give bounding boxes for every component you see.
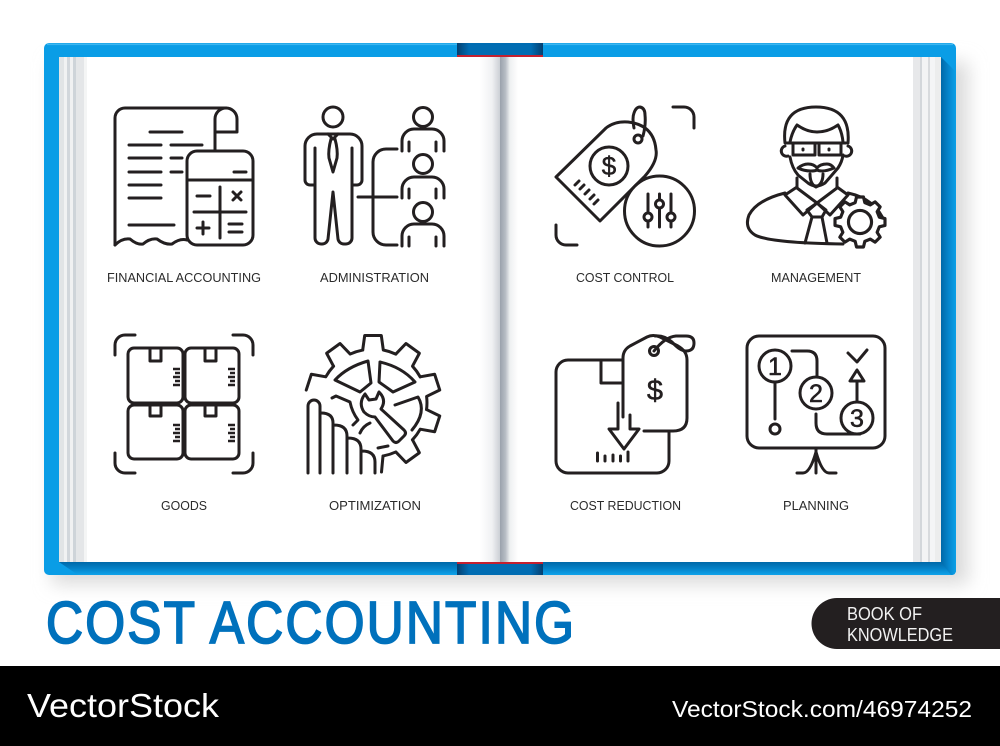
label: cost control: COST CONTROL: [576, 270, 674, 285]
title: COST ACCOUNTING: [46, 590, 574, 656]
badge: book of knowledge: [812, 598, 1000, 649]
label: planning: PLANNING: [783, 498, 849, 513]
label: goods: GOODS: [161, 498, 207, 513]
label: administration: ADMINISTRATION: [320, 270, 429, 285]
spine fold: [480, 57, 518, 562]
label: optimization: OPTIMIZATION: [329, 498, 421, 513]
icon: planning: 3: [850, 405, 864, 433]
footer logo: VectorStock: [27, 688, 219, 725]
icon: management: [747, 107, 885, 247]
label: financial accounting: FINANCIAL ACCOUNTING: [107, 270, 261, 285]
icon: cost reduction: [556, 336, 694, 473]
right page edges: [913, 57, 941, 562]
left page edges: [59, 57, 87, 562]
icon: administration: [305, 107, 444, 246]
icon: cost reduction: $: [647, 375, 663, 407]
label: management: MANAGEMENT: [771, 270, 861, 285]
label: cost reduction: COST REDUCTION: [570, 498, 681, 513]
icon: planning: 2: [809, 380, 823, 408]
icon: cost control: $: [602, 151, 617, 181]
icon: planning: [747, 336, 885, 473]
footer image id: VectorStock.com/46974252: [672, 696, 972, 722]
badge: book of knowledge: KNOWLEDGE: [847, 625, 953, 645]
spine cap bottom: [457, 562, 543, 575]
spine cap top: [457, 43, 543, 57]
book: [44, 43, 968, 584]
icon: cost control: [556, 107, 694, 246]
icon: planning: 1: [768, 353, 782, 381]
footer bar: [0, 666, 1000, 746]
icon: goods: [115, 335, 253, 473]
badge: book of knowledge: BOOK OF: [847, 604, 922, 624]
icon: optimization: [306, 335, 444, 473]
icon: financial accounting: [115, 108, 253, 245]
